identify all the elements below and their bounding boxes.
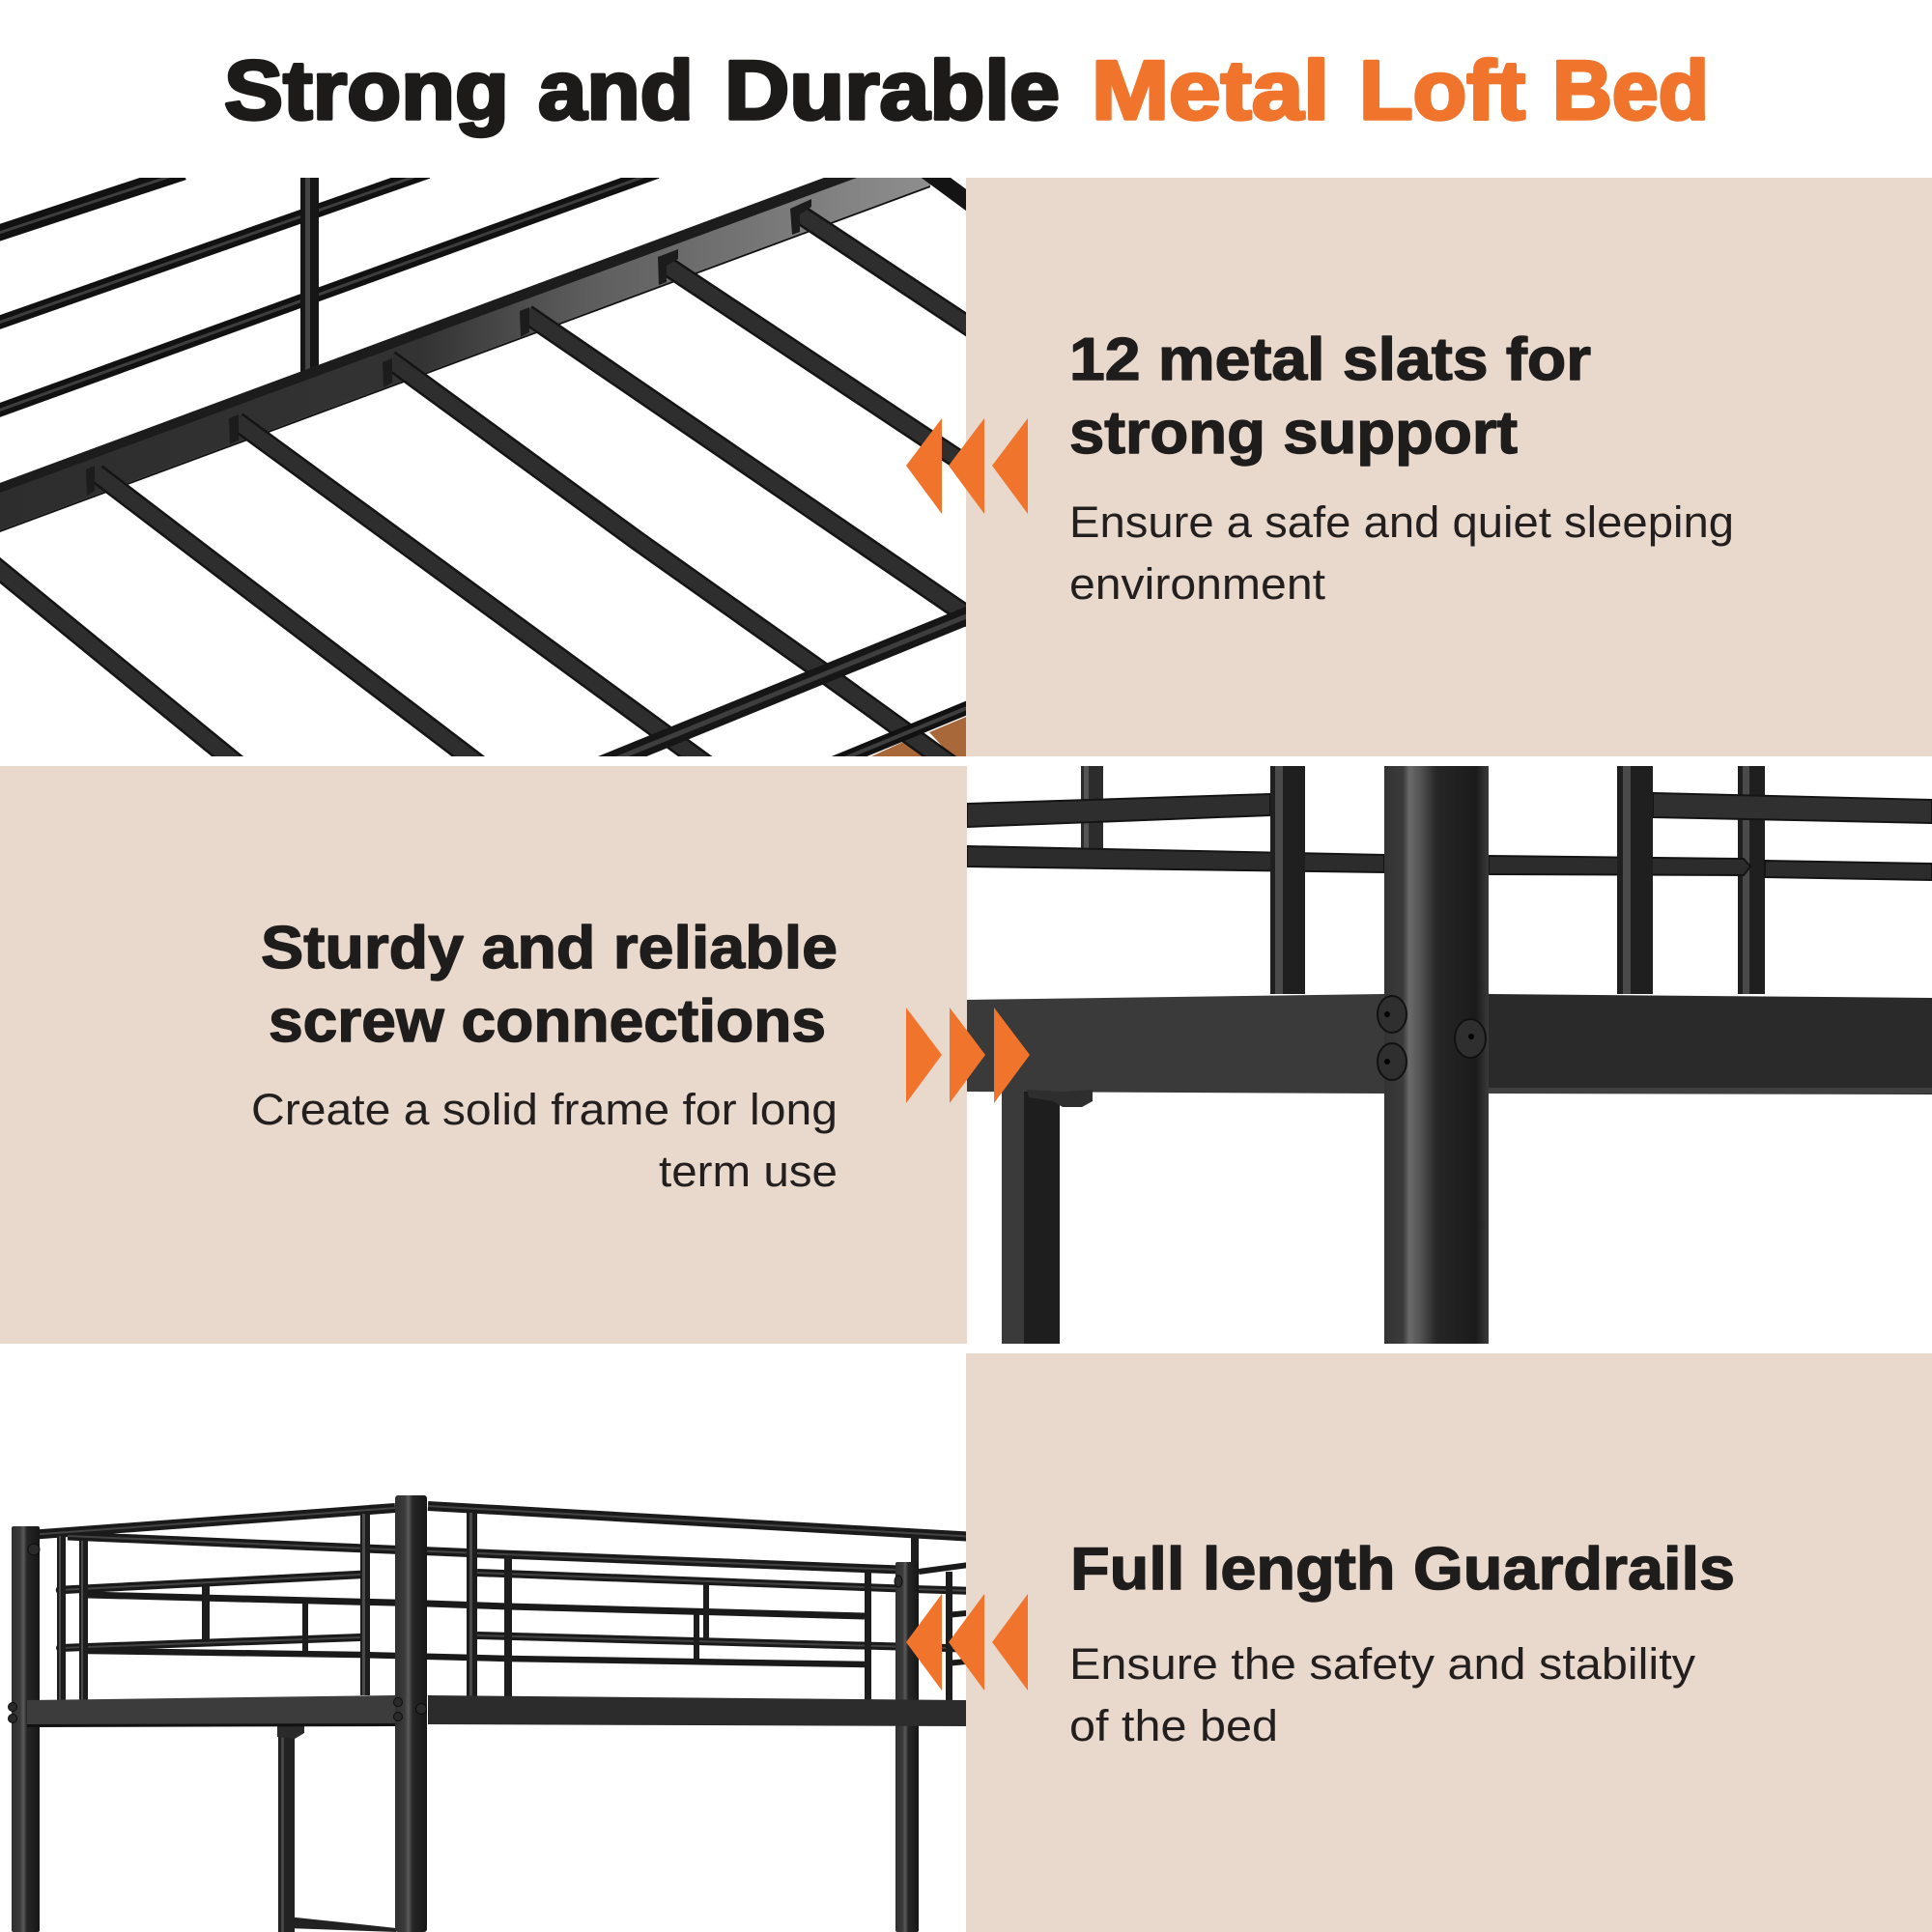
- side beam: [0, 178, 940, 532]
- heading: screws: Sturdy and reliable: [261, 915, 838, 981]
- panel: metal slats photo: [0, 170, 985, 776]
- main post: [1384, 766, 1489, 1344]
- side beams: [967, 994, 1932, 1094]
- vertical bars: [1270, 766, 1653, 994]
- long rails: [29, 1506, 976, 1664]
- slats: [0, 170, 985, 776]
- heading: screws: [261, 915, 838, 1055]
- body text: screws: Create a solid frame for long: [251, 1085, 838, 1134]
- panel: guardrails photo: [8, 1495, 976, 1932]
- vertical balusters: [57, 1513, 952, 1702]
- beams: [27, 1695, 966, 1727]
- wood slats: [871, 717, 966, 756]
- body text: screws: term use: [659, 1147, 838, 1196]
- title: and: [538, 44, 694, 137]
- body text: guardrails: of the bed: [1069, 1701, 1278, 1750]
- posts: [12, 1526, 919, 1932]
- title: Bed: [1552, 44, 1709, 137]
- guardrails: [0, 172, 657, 413]
- panel: guardrails text card: [966, 1353, 1932, 1932]
- vertical post: [300, 174, 319, 375]
- ladder: [277, 1724, 396, 1932]
- body text: slats: [1069, 497, 1734, 609]
- panel: screw connection photo: [967, 766, 1932, 1344]
- title: [224, 44, 1709, 137]
- heading: slats: 12 metal slats for: [1069, 327, 1591, 393]
- heading: screws: screw connections: [269, 988, 826, 1055]
- panel: screw connections text card: [0, 766, 967, 1344]
- body text: screws: [251, 1085, 838, 1196]
- bolts: [1378, 996, 1486, 1080]
- arrows: panel three pointing left: [906, 1594, 1028, 1690]
- panel: slats text card: [966, 178, 1932, 756]
- bolts: [8, 1544, 902, 1723]
- rails: [967, 793, 1932, 880]
- slat brackets: [86, 199, 811, 496]
- arrows: panel one pointing left: [906, 418, 1028, 514]
- title: Durable: [724, 44, 1060, 137]
- heading: slats: strong support: [1069, 400, 1518, 467]
- leg and bracket: [1002, 1090, 1093, 1344]
- body text: slats: Ensure a safe and quiet sleeping: [1069, 497, 1734, 547]
- body text: guardrails: Ensure the safety and stability: [1069, 1639, 1696, 1689]
- body text: guardrails: [1069, 1639, 1696, 1750]
- body text: slats: environment: [1069, 559, 1326, 609]
- title: Strong: [224, 44, 509, 137]
- title: Metal: [1092, 44, 1329, 137]
- arrows: panel two pointing right: [906, 1008, 1030, 1103]
- title: Loft: [1359, 44, 1525, 137]
- rail highlights: [29, 1506, 976, 1649]
- heading: slats: [1069, 327, 1591, 467]
- vertical bars behind rails: [1081, 766, 1765, 994]
- corner post: [395, 1495, 427, 1932]
- heading: guardrails: Full length Guardrails: [1070, 1536, 1735, 1603]
- round cross bars: [598, 607, 966, 756]
